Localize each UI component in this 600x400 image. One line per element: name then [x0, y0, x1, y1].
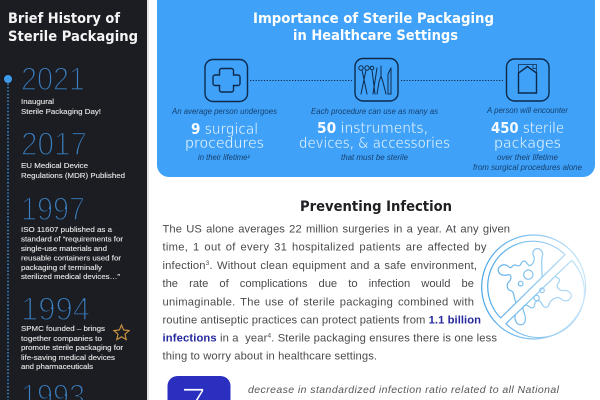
icon: medical cross — [205, 60, 248, 102]
stat: sterile packages: packages — [494, 134, 561, 152]
timeline entry: 1997: ISO 11607 published as a — [21, 225, 113, 234]
text block: preventing infection body: infection — [162, 260, 206, 272]
stat: surgical procedures: in their lifetime¹ — [198, 153, 250, 162]
timeline entry: 1997 — [21, 191, 124, 281]
timeline entry: 1994: and pharmaceuticals — [21, 362, 93, 371]
text block: preventing infection body: thing to worry about in healthcare settings. — [162, 351, 377, 363]
text block: preventing infection body: time, 1 out of every 31 hospitalized patients are affected by — [162, 242, 487, 254]
stat: sterile packages: 450 sterile — [491, 119, 564, 137]
text block: infection ratio note: decrease in standardized infection ratio related to all National — [248, 384, 560, 396]
text block: preventing infection body: 3 — [206, 260, 210, 267]
text block: preventing infection body: . Sterile packaging ensures there is one less — [271, 333, 497, 345]
sidebar heading — [8, 11, 138, 45]
icon: surgical instruments — [355, 58, 398, 101]
heading: preventing infection: Preventing Infection — [300, 199, 452, 215]
timeline entry: 1994: promote sterile packaging for — [21, 343, 124, 352]
timeline entry: 1997: reusable containers used for — [21, 254, 122, 262]
timeline entry: 1994: SPMC founded – brings — [21, 324, 105, 333]
stat: surgical procedures: An average person undergoes — [171, 107, 277, 116]
text block: preventing infection body: the rate of complications due to infection would be — [162, 278, 474, 290]
timeline entry: 2021: 2021 — [21, 61, 85, 97]
timeline entry: 1994: 1994 — [21, 291, 90, 327]
timeline entry: 1997: single-use materials and — [21, 244, 107, 253]
sidebar heading: Brief History of — [8, 11, 121, 27]
icon: star — [114, 325, 129, 340]
stat: instruments per procedure: 50 instruments, — [317, 119, 428, 137]
timeline entry: 2017 — [21, 126, 125, 180]
panel: history sidebar — [0, 0, 149, 400]
stat: instruments per procedure: devices, & accessories — [299, 134, 450, 152]
stat: sterile packages: from surgical procedures alone — [473, 163, 583, 172]
stat: sterile packages: over their lifetime — [497, 153, 559, 162]
timeline entry: 1994: together companies to — [21, 334, 102, 343]
stat: surgical procedures: procedures — [185, 134, 264, 152]
connector: instruments to package — [401, 80, 503, 82]
text block: preventing infection body — [162, 224, 510, 363]
timeline entry: 2021: Inaugural — [21, 97, 54, 106]
timeline entry: 2017: EU Medical Device — [21, 161, 88, 170]
panel: importance of sterile packaging — [157, 0, 595, 177]
timeline entry: 1994 — [21, 291, 124, 371]
text block: preventing infection body: The US alone averages 22 million surgeries in a year. At any given — [162, 224, 510, 236]
timeline entry: 2017: 2017 — [21, 126, 87, 162]
panel heading — [253, 11, 494, 44]
stat: sterile packages: A person will encounter — [486, 106, 568, 115]
timeline entry: 2021 — [21, 61, 101, 116]
text block: preventing infection body: routine antiseptic practices can protect patients from 1.1 billion — [162, 314, 481, 326]
text block: preventing infection body: 4 — [267, 333, 271, 340]
sidebar heading: Sterile Packaging — [8, 29, 138, 45]
text block: preventing infection body: infections in a year — [162, 333, 267, 345]
stat: instruments per procedure — [299, 107, 450, 162]
stat: surgical procedures: 9 surgical — [191, 120, 258, 138]
timeline entry: 2017: Regulations (MDR) Published — [21, 171, 125, 180]
timeline entry: 1997: standard of “requirements for — [21, 234, 124, 244]
icon: sterile package — [506, 59, 549, 101]
stat: instruments per procedure: that must be sterile — [341, 153, 409, 162]
panel heading: in Healthcare Settings — [293, 28, 458, 44]
text block: preventing infection body: unimaginable. The use of sterile packaging combined with — [162, 296, 474, 308]
stat: surgical procedures — [171, 107, 277, 162]
connector: cross to instruments — [250, 80, 352, 82]
timeline entry: 1997: 1997 — [21, 191, 85, 227]
timeline entry: 1997: packaging of terminally — [21, 263, 102, 272]
text block: preventing infection body: . Without clean equipment and a safe environment, — [209, 260, 477, 272]
panel heading: Importance of Sterile Packaging — [253, 11, 494, 27]
icon: no germs — [482, 235, 586, 339]
timeline entry: 2021: Sterile Packaging Day! — [21, 107, 101, 116]
stat tile: 7 percent — [168, 376, 230, 400]
timeline entry: 1994: life-saving medical devices — [21, 353, 115, 362]
stat: sterile packages — [473, 106, 583, 172]
timeline entry: 1997: sterilized medical devices…” — [21, 272, 121, 281]
timeline line and marker — [4, 75, 12, 400]
stat: instruments per procedure: Each procedure can use as many as — [311, 107, 438, 116]
